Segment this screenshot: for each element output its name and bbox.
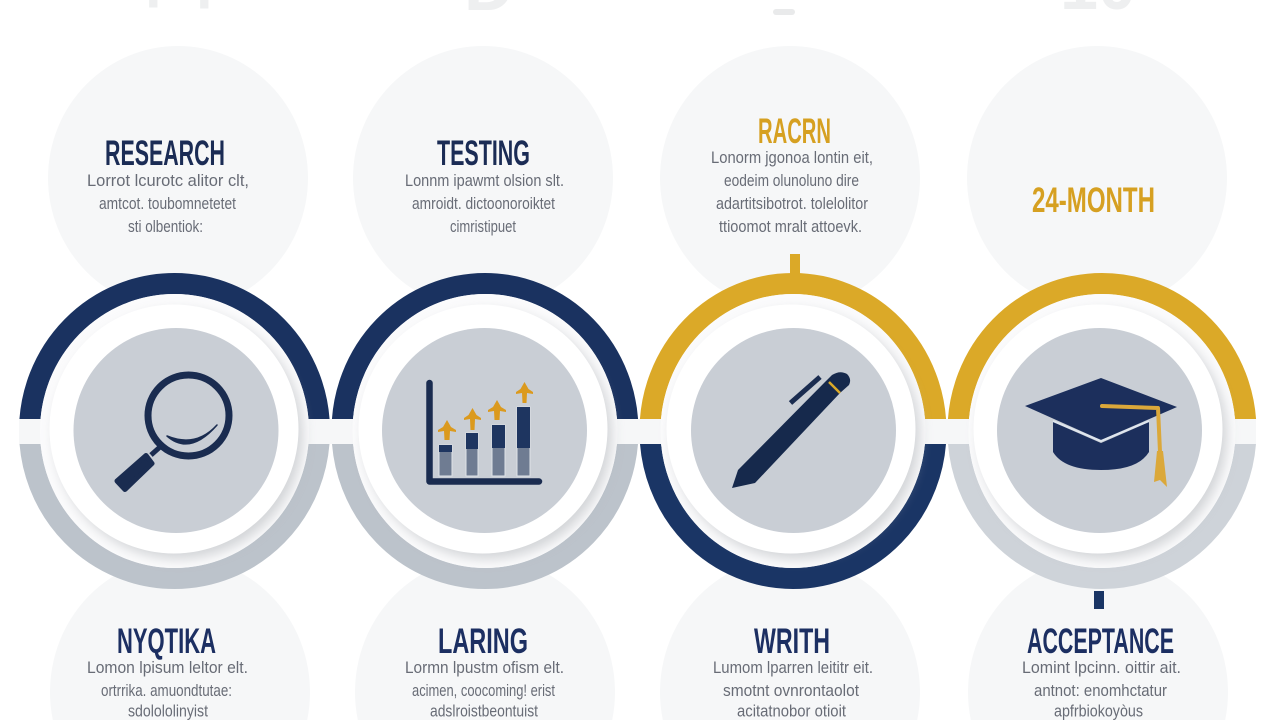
ring 3 bbox=[650, 284, 936, 578]
connector: gold bbox=[790, 254, 800, 275]
panel: laring bottom text bbox=[405, 622, 564, 720]
icon: graduation cap bbox=[1025, 378, 1177, 487]
panel: nyqtika bottom text: NYQTIKA bbox=[117, 622, 216, 661]
white discs bbox=[50, 304, 1222, 554]
panel: research top text: Lorrot lcurotc alitor clt, bbox=[87, 172, 249, 190]
panel: laring bottom text: LARING bbox=[438, 622, 528, 661]
disc shadows bbox=[55, 311, 1227, 559]
ring 4 bbox=[958, 284, 1246, 578]
panel: testing top text: Lonnm ipawmt olsion slt. bbox=[405, 172, 564, 190]
panel: acceptance bottom text bbox=[1022, 622, 1181, 720]
panel: writh bottom text: WRITH bbox=[754, 622, 830, 661]
panel: nyqtika bottom text: sdolololinyist bbox=[128, 702, 208, 720]
icon: bar chart with arrows bbox=[430, 382, 539, 482]
panel: research top text: amtcot. toubomnetetet bbox=[99, 195, 236, 213]
ring 1 bbox=[30, 284, 320, 578]
panel: racrn top text: eodeim olunoluno dire bbox=[724, 172, 859, 190]
panel: writh bottom text: smotnt ovnrontaolot bbox=[723, 682, 859, 700]
panel: testing top text: cimristipuet bbox=[450, 218, 516, 236]
panel: racrn top text: ttioomot mralt attoevk. bbox=[719, 218, 862, 236]
panel: racrn top text: adartitsibotrot. tolelolitor bbox=[716, 195, 868, 213]
panel: nyqtika bottom text: Lomon lpisum leltor elt. bbox=[87, 659, 248, 677]
panel: acceptance bottom text: Lomint lpcinn. oittir ait. bbox=[1022, 659, 1181, 677]
grey inner discs bbox=[74, 328, 1202, 533]
panel: racrn top text bbox=[711, 112, 873, 236]
icon: magnifying glass bbox=[117, 375, 229, 490]
panel: research top text: RESEARCH bbox=[105, 134, 225, 173]
panel: testing top text: amroidt. dictoonoroiktet bbox=[412, 195, 555, 213]
panel: laring bottom text: adslroistbeontuist bbox=[430, 702, 538, 720]
connector: navy bbox=[1094, 591, 1104, 609]
panel: testing top text: TESTING bbox=[437, 134, 530, 173]
panel: writh bottom text: acitatnobor otioit bbox=[737, 702, 846, 720]
panel: research top text bbox=[87, 134, 249, 236]
ring 2 bbox=[342, 284, 628, 578]
panel: writh bottom text bbox=[713, 622, 873, 720]
panel: nyqtika bottom text bbox=[87, 622, 248, 720]
panel: laring bottom text: acimen, coocoming! erist bbox=[412, 682, 555, 700]
panel: acceptance bottom text: apfrbiokoyòus bbox=[1054, 702, 1143, 720]
panel: acceptance bottom text: ACCEPTANCE bbox=[1027, 622, 1174, 661]
pale centre band bbox=[19, 419, 1256, 444]
white ring interiors bbox=[40, 294, 1236, 568]
panel: testing top text bbox=[405, 134, 564, 236]
panel: writh bottom text: Lumom lparren leititr eit. bbox=[713, 659, 873, 677]
panel: acceptance bottom text: antnot: enomhctatur bbox=[1034, 682, 1167, 700]
panel: racrn top text: RACRN bbox=[758, 112, 831, 151]
panel: laring bottom text: Lormn lpustm ofism elt. bbox=[405, 659, 564, 677]
panel: racrn top text: Lonorm jgonoa lontin eit, bbox=[711, 149, 873, 167]
panel: nyqtika bottom text: ortrrika. amuondtutae: bbox=[101, 682, 232, 700]
icon: pen bbox=[732, 372, 850, 488]
clipped title fragments bbox=[145, 0, 1136, 25]
panel: research top text: sti olbentiok: bbox=[128, 218, 203, 236]
panel: 24-month heading: 24-MONTH bbox=[1032, 181, 1155, 220]
